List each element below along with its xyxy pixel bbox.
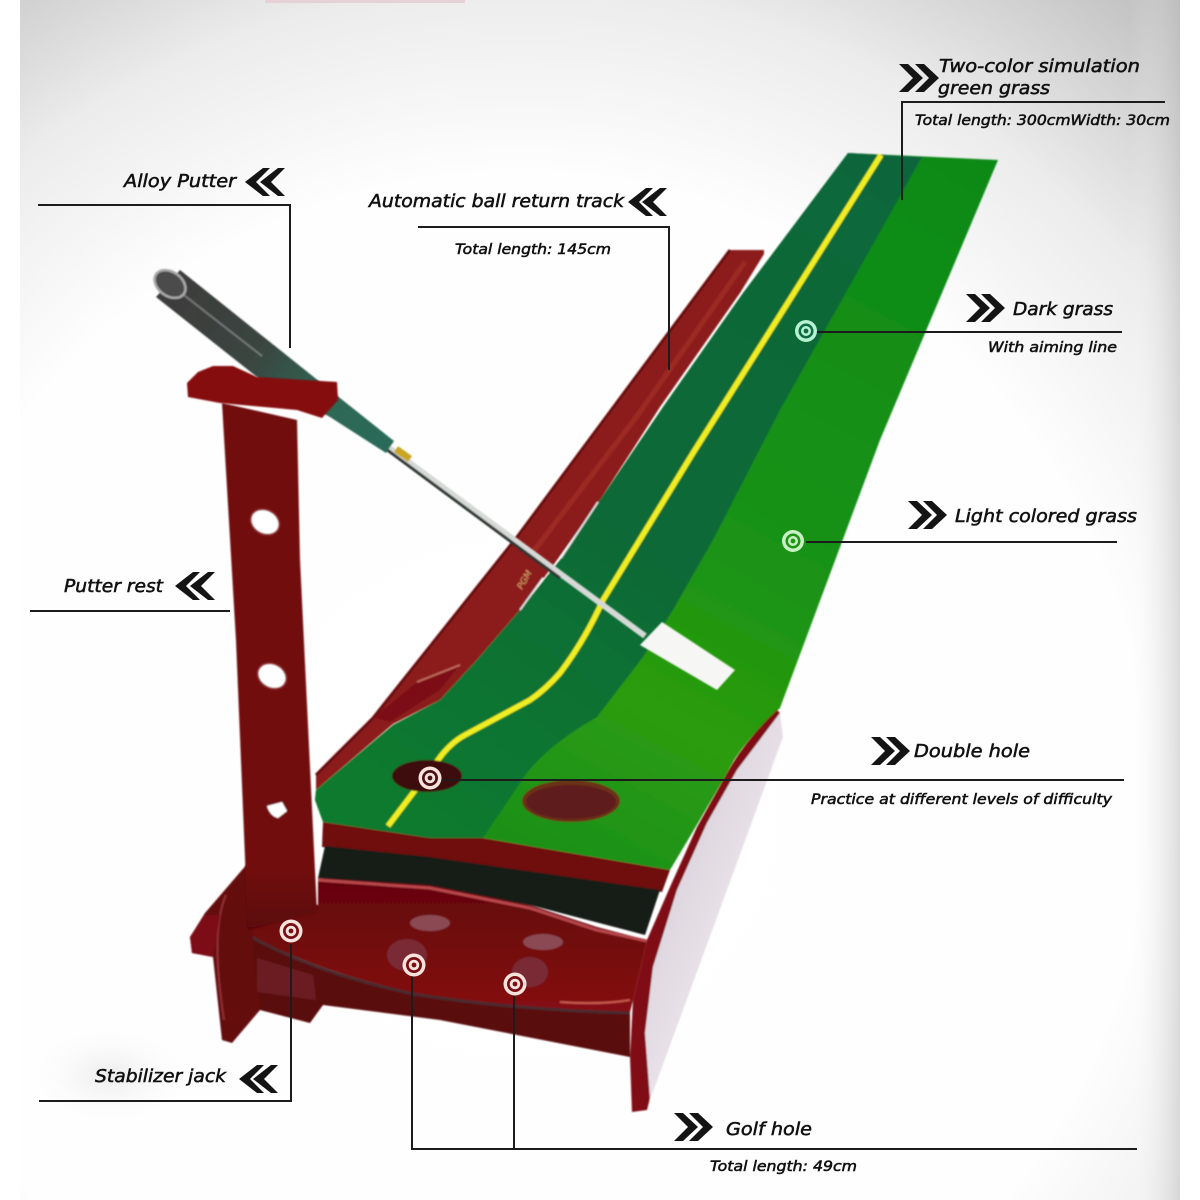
post holes bbox=[246, 504, 291, 818]
grip bbox=[156, 270, 394, 453]
callout: putter rest: Putter rest bbox=[64, 576, 164, 597]
double hole bbox=[392, 760, 620, 822]
icon: chevrons left bbox=[245, 168, 285, 196]
callout: light colored grass: Light colored grass bbox=[955, 506, 1137, 527]
callout: double hole bbox=[418, 737, 1124, 808]
ball return track bbox=[316, 250, 764, 790]
callout: light colored grass bbox=[782, 501, 1137, 552]
aiming line bbox=[388, 155, 881, 826]
callout: two-color simulation green grass: Total length: 300cmWidth: 30cm bbox=[915, 113, 1170, 129]
icon: chevrons left bbox=[239, 1065, 278, 1093]
icon: target bbox=[280, 920, 302, 942]
callout: automatic ball return track: Automatic ball return track bbox=[368, 191, 626, 212]
callout: alloy putter: Alloy Putter bbox=[123, 171, 238, 192]
icon: chevrons left bbox=[175, 572, 215, 600]
icon: chevrons right bbox=[871, 737, 910, 765]
callout: putter rest bbox=[30, 572, 230, 611]
callout: stabilizer jack bbox=[39, 920, 302, 1101]
callout: dark grass: With aiming line bbox=[988, 340, 1117, 356]
shaft bbox=[384, 444, 645, 636]
icon: chevrons right bbox=[899, 64, 939, 92]
mat: dark grass bbox=[315, 153, 922, 838]
mat: light coloured grass bbox=[315, 153, 998, 870]
white gap beside mat bbox=[520, 502, 598, 610]
icon: chevrons right bbox=[674, 1113, 713, 1141]
icon: target left hole bbox=[402, 954, 426, 976]
product: putting mat with return track bbox=[190, 153, 998, 1112]
callout: two-color simulation green grass bbox=[899, 56, 1170, 200]
callout: two-color simulation green grass: green grass bbox=[938, 78, 1050, 99]
callout: golf hole: Golf hole bbox=[726, 1119, 812, 1140]
callout: dark grass: Dark grass bbox=[1013, 299, 1113, 320]
callout: two-color simulation green grass: Two-color simulation bbox=[939, 56, 1140, 77]
putter head bbox=[640, 622, 735, 690]
callout: stabilizer jack: Stabilizer jack bbox=[95, 1066, 228, 1087]
tray bbox=[250, 878, 647, 1012]
alloy putter bbox=[149, 264, 735, 690]
putter rest bbox=[222, 403, 317, 930]
icon: target bbox=[782, 530, 804, 552]
icon: chevrons left bbox=[628, 188, 667, 216]
putter rest cap bbox=[187, 366, 338, 418]
callout: double hole: Practice at different levels of difficulty bbox=[811, 792, 1112, 808]
callout: automatic ball return track bbox=[368, 188, 669, 370]
right side panel bbox=[630, 710, 783, 1112]
front base bbox=[240, 822, 670, 1057]
left support and stabilizer jack bbox=[190, 863, 260, 1043]
icon: target right hole bbox=[504, 972, 526, 996]
callout: automatic ball return track: Total length: 145cm bbox=[455, 242, 611, 258]
callout: alloy putter bbox=[38, 168, 290, 348]
icon: target bbox=[795, 320, 817, 342]
icon: chevrons right bbox=[908, 501, 947, 529]
callout: golf hole: Total length: 49cm bbox=[710, 1159, 857, 1175]
callout: dark grass bbox=[795, 294, 1122, 356]
callout: golf hole bbox=[402, 954, 1137, 1175]
icon: target bbox=[418, 766, 442, 790]
icon: chevrons right bbox=[966, 294, 1005, 322]
callout: double hole: Double hole bbox=[914, 741, 1030, 762]
ball return track: PGM bbox=[516, 569, 535, 592]
